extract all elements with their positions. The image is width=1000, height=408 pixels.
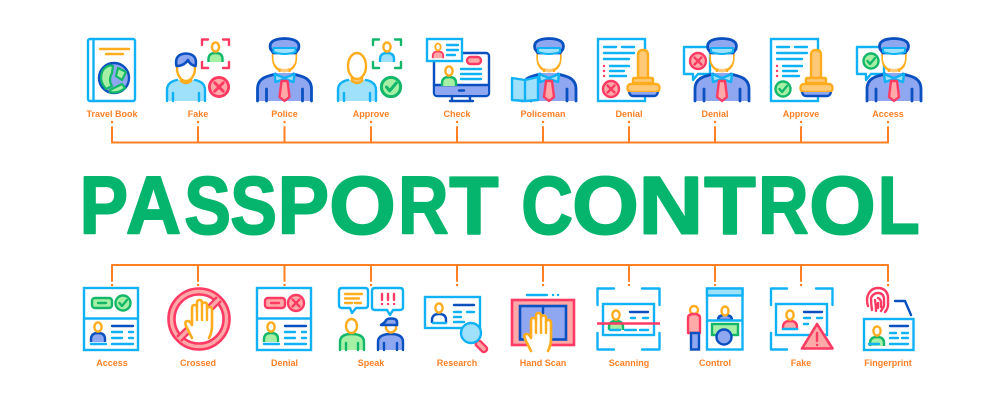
icon: policeman with book — [512, 38, 576, 101]
label: Hand Scan: Hand Scan — [520, 358, 566, 368]
title — [80, 160, 920, 252]
icon: police officer — [258, 38, 312, 101]
label: Control: Control — [699, 358, 731, 368]
icon: denial form — [257, 288, 311, 350]
icon: research — [425, 297, 488, 353]
title: O — [329, 160, 396, 252]
title: A — [126, 160, 181, 252]
title: T — [704, 160, 756, 252]
label: Check: Check — [443, 109, 472, 119]
label: Policeman: Policeman — [520, 109, 566, 119]
connector: top bracket — [112, 122, 888, 142]
icon: speak — [339, 288, 403, 350]
icon: denial officer — [684, 38, 749, 101]
icon: approved person — [338, 40, 401, 101]
icon: control booth — [688, 288, 742, 350]
icon: crossed hand — [168, 288, 230, 350]
title: S — [184, 160, 231, 252]
label: Access form: Access — [96, 358, 128, 368]
label: Speak: Speak — [358, 358, 385, 368]
title: L — [878, 160, 920, 252]
title: N — [639, 160, 703, 252]
title: P — [278, 160, 329, 252]
title: P — [80, 160, 128, 252]
icon: check on monitor — [427, 39, 489, 101]
label: Approve document: Approve — [783, 109, 819, 119]
title: R — [398, 160, 448, 252]
label: Crossed: Crossed — [180, 358, 216, 368]
label: Denial officer: Denial — [701, 109, 729, 119]
label: Scanning: Scanning — [609, 358, 649, 368]
label: Denial document: Denial — [615, 109, 643, 119]
icon: travel book — [88, 39, 135, 101]
icon: denial document and stamp — [598, 39, 660, 101]
label: Approve: Approve — [353, 109, 389, 119]
icon: access officer — [857, 38, 921, 101]
icon: approve document and stamp — [771, 39, 832, 101]
icon: access form — [84, 288, 138, 350]
title: C — [521, 160, 573, 252]
title: O — [572, 160, 639, 252]
label: Fake: Fake — [188, 109, 208, 119]
label: Access: Access — [872, 109, 904, 119]
icon: scanning — [597, 288, 660, 350]
title: O — [809, 160, 876, 252]
label: Travel Book: Travel Book — [86, 109, 138, 119]
connector: bottom bracket — [112, 265, 888, 285]
icon: fake card warning — [771, 288, 832, 350]
label: Fake card: Fake — [791, 358, 811, 368]
icon: fingerprint card — [864, 288, 914, 350]
title: S — [230, 160, 277, 252]
label: Research: Research — [437, 358, 477, 368]
title: T — [449, 160, 498, 252]
label: Denial form: Denial — [271, 358, 298, 368]
label: Police: Police — [271, 109, 298, 119]
label: Fingerprint: Fingerprint — [864, 358, 912, 368]
icon: hand scan — [512, 295, 574, 351]
title: R — [758, 160, 808, 252]
icon: fake person — [167, 40, 229, 101]
